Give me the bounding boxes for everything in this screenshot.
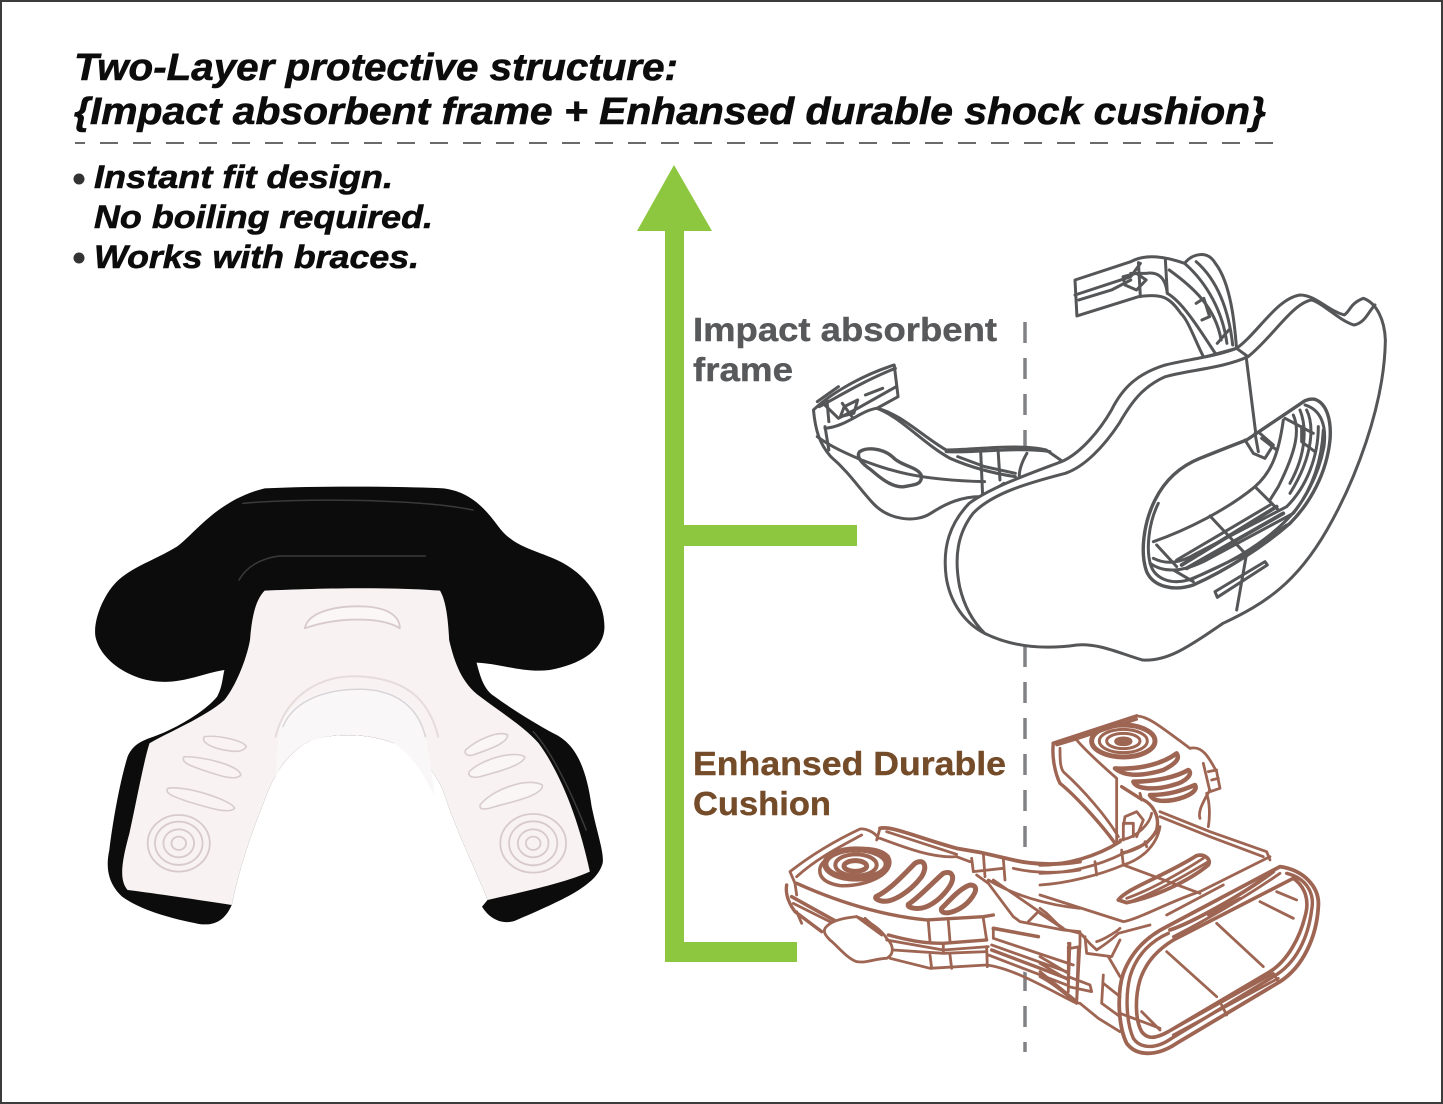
left wing: [813, 365, 1065, 519]
feature bullet list: [74, 159, 433, 275]
shield body: [945, 295, 1385, 660]
frame edge highlights: [239, 500, 586, 830]
green upward arrow with branches: [637, 165, 857, 962]
back pad: [1053, 716, 1137, 743]
left concentric pad: [820, 849, 890, 886]
right body of cushion: [1040, 716, 1318, 1053]
breathing opening: [1143, 399, 1330, 610]
back concentric pad: [1092, 725, 1155, 757]
label: impact absorbent frame: frame: [693, 351, 793, 388]
label: enhansed durable cushion: Cushion: [693, 785, 831, 822]
oblong pill: [1118, 855, 1209, 903]
impact absorbent frame line drawing: [813, 255, 1385, 660]
label: enhansed durable cushion: [693, 745, 1006, 822]
label: impact absorbent frame: Impact absorbent: [693, 311, 997, 348]
mouthguard photo illustration: [95, 487, 604, 924]
arch interior: [276, 688, 435, 797]
right wing: [1075, 255, 1237, 357]
cushion silhouette: [785, 716, 1318, 1054]
left ribs: [876, 862, 925, 901]
right concentric dome: [500, 814, 566, 873]
side bump: [824, 917, 892, 962]
feature bullet list: Works with braces.: [94, 239, 419, 275]
enhansed durable cushion line drawing: [785, 716, 1318, 1054]
cushion top ridge: [305, 606, 400, 628]
left cushion ribs: [167, 736, 246, 811]
title: [74, 47, 1266, 133]
right cushion ribs: [465, 734, 542, 809]
label: impact absorbent frame: [693, 311, 997, 388]
title: Two-Layer protective structure:: [74, 47, 678, 89]
centre dashed axis: [1023, 322, 1027, 1052]
back ribs: [1115, 753, 1178, 775]
feature bullet list: No boiling required.: [94, 199, 433, 235]
feature bullet list: Instant fit design.: [94, 159, 393, 195]
black frame: [95, 487, 604, 924]
label: enhansed durable cushion: Enhansed Durable: [693, 745, 1006, 782]
white cushion: [122, 588, 590, 905]
oval opening: [1119, 867, 1318, 1053]
title: {Impact absorbent frame + Enhansed durable shock cushion}: [74, 91, 1266, 133]
shield inner edge: [957, 357, 1248, 633]
left concentric dome: [148, 815, 210, 872]
left arm of cushion: [786, 828, 1080, 1003]
